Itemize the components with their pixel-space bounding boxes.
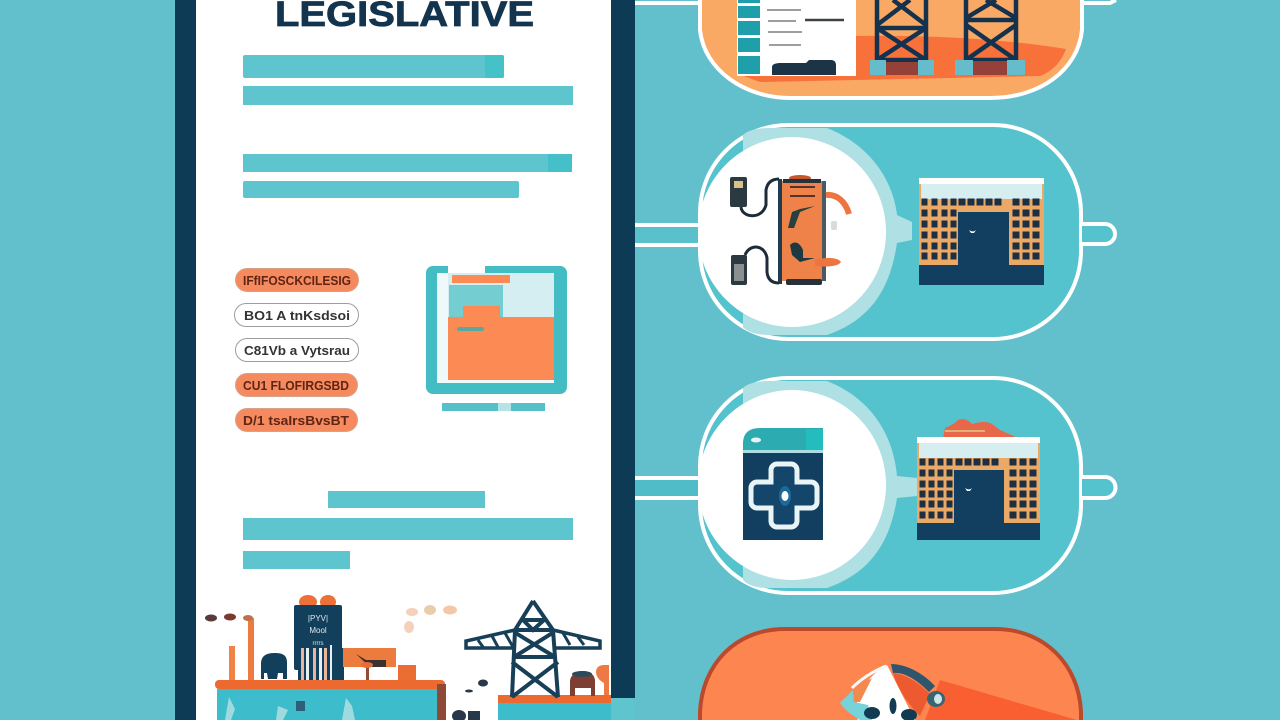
capsule 2: power and building — [635, 125, 1115, 339]
pill: orange 5: D/1 tsaIrsBvsBT — [243, 413, 349, 428]
orange ground — [738, 36, 1066, 82]
factory platform — [215, 680, 446, 720]
illustration: factory and pylon scene — [205, 595, 611, 720]
top connector — [635, 1, 700, 5]
connector right — [1082, 224, 1115, 244]
shadow beam — [925, 680, 1077, 720]
dark animal silhouette left — [261, 653, 287, 679]
pill: orange 1 — [236, 268, 358, 292]
capsule 4: orange animal panel — [700, 629, 1081, 720]
tower 2 base — [955, 60, 1025, 75]
pale smoke puffs — [404, 605, 457, 633]
control building: |PYV| — [308, 614, 328, 623]
pill: outline 3 — [236, 338, 358, 362]
white circle — [698, 390, 886, 580]
right platform — [498, 695, 611, 720]
pill: orange 4: CU1 FLOFIRGSBD — [243, 378, 349, 393]
icon: medical cross card — [743, 428, 823, 540]
text bars: first paragraph — [243, 55, 573, 105]
control building: rrrrs — [312, 641, 324, 647]
icon: spotted animal — [840, 664, 945, 720]
smokestacks and smoke — [205, 614, 254, 680]
tower 1 base — [870, 60, 934, 75]
connector left — [635, 477, 700, 499]
windows — [920, 459, 1036, 518]
capsule 3: health and building — [635, 378, 1116, 593]
pill: outline 2: BO1 A tnKsdsoi — [244, 308, 350, 323]
control building: Mool — [309, 626, 327, 635]
icon: electrical device — [730, 175, 849, 285]
tower 1 — [877, 0, 926, 60]
text bars: second paragraph — [243, 154, 572, 198]
animal silhouette right — [570, 665, 609, 696]
building with roof — [917, 419, 1040, 540]
tower 2 — [966, 0, 1016, 60]
windows — [922, 199, 1039, 259]
halo — [743, 128, 912, 335]
capsule 1: orange tower scene — [635, 0, 1116, 98]
capsule outline — [700, 125, 1081, 339]
connector right — [1082, 477, 1116, 498]
pill: orange 4 — [236, 374, 358, 396]
text bars: third paragraph — [243, 491, 573, 569]
pill: outline 3: C81Vb a Vytsrau — [244, 343, 350, 358]
halo — [743, 381, 917, 588]
capsule outline — [700, 378, 1081, 593]
pill: orange 1: IFfIFOSCKCILESIG — [243, 273, 351, 288]
icon: monitor — [426, 264, 567, 411]
control building — [294, 595, 344, 680]
building — [919, 178, 1044, 285]
orange machinery — [343, 648, 416, 680]
connector left — [635, 225, 700, 247]
building with document — [737, 0, 856, 76]
pill list — [234, 268, 358, 432]
pill: outline 2 — [234, 304, 358, 326]
pill: orange 5 — [236, 408, 358, 432]
icon: transmission pylon — [466, 601, 600, 697]
white circle — [698, 137, 886, 327]
panel: legislative document — [175, 0, 635, 720]
debris — [452, 680, 488, 720]
